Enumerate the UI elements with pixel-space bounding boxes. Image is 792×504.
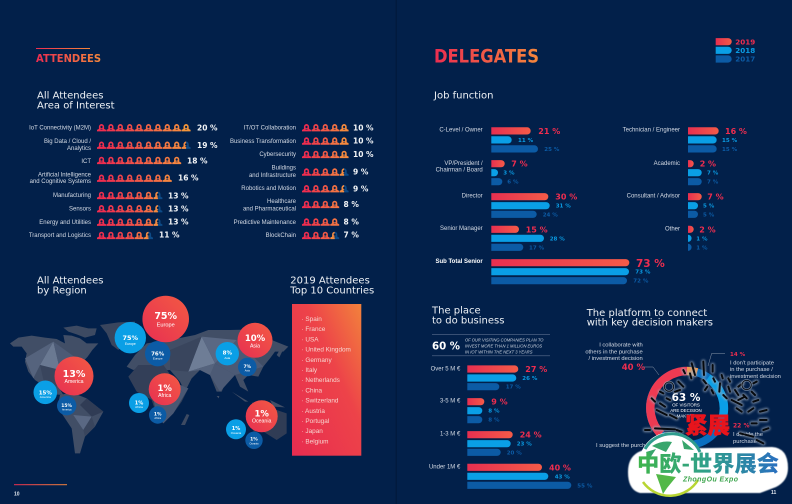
row: IoT connectivity: 20 %	[197, 124, 218, 133]
bars: academic: 2 %	[700, 160, 716, 169]
bars: director: Director	[462, 194, 483, 200]
bars: technician: Technician / Engineer	[623, 128, 680, 134]
map: europe asia africa oceania	[127, 329, 288, 440]
bubbles: africa: Africa	[135, 405, 143, 409]
row: buildings: and Infrastructure	[249, 173, 297, 179]
row: healthcare	[243, 199, 359, 212]
panel: countries list: · USA	[302, 336, 319, 343]
heading: area of interest: All Attendees	[37, 90, 103, 101]
bubbles: oceania: Oceania	[252, 418, 271, 424]
row: buildings: Buildings	[272, 166, 296, 172]
callout: 60 percent: IN IOT WITHIN THE NEXT 3 YEARS	[465, 350, 533, 355]
panel: countries list: · Portugal	[302, 418, 329, 425]
row: business transformation	[230, 137, 374, 146]
callout: 60 percent: OF OUR VISITING COMPANIES PLAN TO	[465, 338, 543, 342]
callout: 60 percent: 60 %	[432, 340, 460, 352]
callout: 40 percent: I collaborate with	[599, 343, 643, 349]
world map	[10, 322, 288, 453]
bars: sub total senior: 72 %	[633, 279, 649, 285]
panel: attendees page	[10, 48, 374, 498]
bubbles: asia: Asia	[250, 344, 260, 350]
bars: over 5M: 27 %	[525, 365, 547, 374]
bars: c-level: 21 %	[538, 127, 560, 136]
row: big data: 19 %	[197, 141, 218, 150]
row: energy and utilities: Energy and Utilities	[39, 220, 91, 226]
callout: 14 percent	[708, 352, 781, 380]
bars: vp: 6 %	[507, 180, 519, 186]
row: big data: Analytics	[67, 146, 91, 152]
bubbles: america: America	[40, 395, 51, 399]
bars: under 1M: 55 %	[577, 483, 593, 489]
bubbles: oceania: 1%	[232, 426, 240, 432]
heading: the place to do business: to do business	[432, 315, 504, 326]
page number 11: 11	[771, 490, 777, 496]
legend: years	[716, 38, 755, 64]
panel: countries list	[292, 304, 361, 456]
heading: by region: All Attendees	[37, 275, 103, 286]
bars: vp: VP/President /	[444, 161, 483, 167]
bubbles: africa	[129, 373, 181, 424]
heading: delegates: DELEGATES	[434, 46, 539, 68]
bubbles: europe: Europe	[153, 356, 163, 360]
bars: c-level	[439, 127, 560, 153]
bubbles: america: America	[62, 408, 72, 412]
row: healthcare: 8 %	[344, 200, 359, 209]
heading: attendees: ATTENDEES	[36, 53, 101, 65]
legend: years: 2018	[735, 47, 755, 55]
row: ICT: ICT	[81, 159, 91, 165]
bars: director: 30 %	[555, 193, 577, 202]
chart: job function right	[623, 127, 747, 251]
bars: academic: 7 %	[707, 171, 719, 177]
callout: suggest: I suggest the purchase	[596, 443, 655, 449]
panel: countries list: · Austria	[302, 408, 325, 415]
chart: decision makers donut: MAKERS	[677, 414, 695, 418]
watermark: speckle	[645, 362, 768, 443]
heading: job function: Job function	[433, 90, 493, 101]
bars: director: 31 %	[556, 204, 571, 210]
bars: consultant: 7 %	[707, 193, 724, 202]
bars: vp: Chairman / Board	[436, 168, 483, 174]
bubbles: america: 15%	[61, 403, 73, 409]
callout: 40 percent	[585, 343, 659, 375]
page number 10	[14, 484, 67, 498]
bars: c-level: 11 %	[518, 138, 534, 144]
bubbles: oceania: 1%	[254, 410, 269, 420]
bars: other: 1 %	[696, 245, 708, 251]
bars: 3-5M: 8 %	[488, 418, 500, 424]
row: robotics and motion: Robotics and Motion	[241, 186, 296, 192]
bars: 1-3M: 1-3 M €	[440, 432, 461, 438]
row: IT/OT collaboration	[244, 124, 374, 133]
map: americas	[10, 322, 135, 453]
bars: academic: Academic	[654, 161, 680, 167]
bars: technician: 16 %	[725, 127, 747, 136]
bubbles: oceania	[226, 400, 278, 449]
bubbles: europe: Europe	[157, 322, 175, 328]
bars: 3-5M: 3-5 M €	[440, 398, 461, 404]
row: blockchain: 7 %	[344, 230, 359, 239]
bars: senior manager: 17 %	[529, 245, 545, 251]
row: business transformation: 10 %	[353, 137, 374, 146]
bubbles: america: America	[64, 379, 84, 385]
callout: 40 percent: / investment decision	[589, 356, 643, 362]
callout: 14 percent: 14 %	[730, 352, 746, 358]
chart: interest left column	[29, 124, 218, 239]
row: blockchain: BlockChain	[266, 233, 296, 239]
bars: 3-5M: 8 %	[488, 409, 500, 415]
row: buildings	[249, 166, 369, 179]
chart: job function left	[435, 127, 665, 285]
bars: technician	[623, 127, 747, 153]
row: energy and utilities: 13 %	[168, 218, 189, 227]
row: artificial intelligence: 16 %	[178, 174, 199, 183]
row: IoT connectivity	[29, 124, 218, 133]
bars: over 5M: 26 %	[522, 376, 538, 382]
heading: top 10 countries: 2019 Attendees	[290, 275, 370, 286]
row: artificial intelligence: and Cognitive Systems	[30, 179, 91, 185]
legend: years: 2019	[735, 38, 755, 46]
panel: countries list: · Belgium	[302, 438, 328, 445]
bars: technician: 15 %	[722, 147, 738, 153]
callout: 60 percent: INVEST MORE THAN 1 MILLION EUROS	[465, 344, 542, 349]
bubbles: europe: 76%	[151, 352, 165, 358]
bars: consultant: 5 %	[703, 212, 715, 218]
chart: investment	[429, 365, 593, 489]
callout: 14 percent: investment decision	[730, 374, 781, 380]
row: sensors: 13 %	[168, 204, 189, 213]
bars: sub total senior: 73 %	[636, 258, 665, 270]
panel: countries list: · United Kingdom	[302, 347, 351, 354]
bars: 1-3M	[440, 431, 542, 456]
row: artificial intelligence	[30, 172, 199, 185]
chart: decision makers donut: OF VISITORS	[672, 402, 700, 408]
bars: 3-5M	[440, 398, 508, 424]
bars: sub total senior: Sub Total Senior	[435, 259, 483, 265]
bars: director	[462, 193, 577, 218]
heading: platform: The platform to connect	[587, 308, 707, 319]
callout: 40 percent: others in the purchase	[585, 350, 643, 356]
bubbles: europe: 75%	[154, 311, 178, 322]
legend: years: 2017	[735, 56, 755, 64]
bubbles: america: 13%	[63, 369, 86, 380]
row: sensors: Sensors	[69, 206, 91, 212]
row: IT/OT collaboration: IT/OT Collaboration	[244, 126, 296, 132]
row: blockchain	[266, 230, 359, 239]
bars: 1-3M: 24 %	[520, 431, 542, 440]
panel: countries list: · Netherlands	[302, 377, 340, 384]
bubbles: oceania: 1%	[250, 436, 258, 442]
bars: over 5M: 17 %	[506, 385, 521, 391]
bars: senior manager	[440, 225, 565, 251]
row: robotics and motion	[241, 185, 369, 194]
bars: consultant	[627, 193, 724, 218]
watermark: red characters: 紧展	[685, 408, 730, 440]
bubbles: europe	[115, 296, 189, 366]
bars: senior manager: 28 %	[550, 236, 565, 242]
row: energy and utilities	[39, 218, 189, 227]
bars: other: Other	[665, 226, 680, 232]
row: cybersecurity: 10 %	[353, 150, 374, 159]
row: IoT connectivity: IoT Connectivity (M2M)	[29, 126, 91, 132]
callout: 22 percent: 22 %	[733, 423, 749, 430]
row: business transformation: Business Transformation	[230, 139, 296, 145]
row: transport and logistics: Transport and Logistics	[29, 233, 91, 239]
bubbles: europe: 75%	[123, 334, 139, 342]
row: predictive maintenance: 8 %	[344, 217, 359, 226]
row: ICT	[81, 157, 208, 166]
row: big data: Big Data / Cloud /	[44, 139, 91, 145]
row: sensors	[69, 204, 189, 213]
bubbles: asia: 10%	[245, 334, 266, 344]
bubbles: america: 15%	[39, 390, 52, 396]
panel: countries list: · Japan	[302, 428, 323, 435]
callout: 22 percent	[733, 423, 763, 445]
bars: under 1M: Under 1M €	[429, 464, 461, 470]
chart: decision makers donut	[650, 371, 724, 445]
panel: countries list: · China	[302, 387, 323, 394]
bars: other	[665, 225, 716, 251]
row: buildings: 9 %	[353, 167, 369, 176]
heading: top 10 countries: Top 10 Countries	[289, 285, 374, 296]
bars: academic	[654, 160, 719, 186]
row: cybersecurity	[259, 150, 374, 159]
row: big data	[44, 139, 218, 152]
bars: vp	[436, 160, 528, 186]
bubbles: asia: Asia	[245, 368, 250, 372]
row: artificial intelligence: Artificial Intelligence	[38, 172, 91, 178]
heading: attendees	[36, 48, 101, 65]
row: predictive maintenance: Predictive Maintenance	[234, 220, 297, 226]
bars: director: 24 %	[543, 212, 558, 218]
bubbles: africa: 1%	[135, 400, 143, 406]
row: cybersecurity: Cybersecurity	[259, 152, 296, 158]
chart: decision makers donut: ARE DECISION	[670, 408, 702, 413]
callout: 14 percent: I don't participate	[730, 360, 774, 366]
heading: the place to do business: The place	[432, 306, 481, 317]
bars: other: 2 %	[699, 225, 716, 234]
watermark: zhongou expo logo: 中欧-世界展会	[637, 446, 779, 478]
page number 10: 10	[14, 492, 20, 498]
bubbles: asia: 8%	[223, 350, 232, 356]
bubbles: oceania: Oceania	[250, 442, 259, 445]
bars: under 1M: 43 %	[555, 474, 570, 480]
bubbles: asia	[216, 323, 272, 376]
bars: consultant: 5 %	[703, 204, 715, 210]
panel: countries list: · France	[302, 326, 326, 333]
bars: other: 1 %	[696, 236, 708, 242]
bars: consultant: Consultant / Advisor	[627, 194, 680, 200]
bars: vp: 3 %	[503, 171, 515, 177]
bars: c-level: 25 %	[544, 147, 560, 153]
watermark: zhongou expo logo: ZhongOu Expo	[682, 476, 739, 484]
bars: over 5M: Over 5 M €	[431, 366, 461, 372]
bars: technician: 15 %	[722, 138, 738, 144]
bars: sub total senior	[435, 258, 665, 285]
callout: 22 percent: purchase	[733, 439, 757, 445]
bars: 1-3M: 23 %	[517, 442, 532, 448]
panel: countries list: · Germany	[302, 357, 332, 364]
bars: 1-3M: 20 %	[507, 450, 522, 456]
bubbles: africa: 1%	[154, 412, 162, 418]
heading: platform: with key decision makers	[587, 318, 713, 329]
row: predictive maintenance	[234, 217, 359, 226]
panel: countries list: · Italy	[302, 367, 318, 374]
panel: countries list: · Switzerland	[302, 398, 339, 405]
row: healthcare: and Pharmaceutical	[243, 206, 296, 212]
bars: under 1M	[429, 463, 593, 489]
panel: countries list: · Spain	[302, 316, 322, 323]
heading: area of interest: Area of Interest	[37, 100, 115, 111]
bubbles: africa: Africa	[154, 416, 162, 420]
row: healthcare: Healthcare	[267, 199, 296, 205]
callout: 60 percent	[432, 334, 550, 356]
row: manufacturing	[53, 192, 189, 201]
bars: 3-5M: 9 %	[491, 398, 508, 407]
bars: sub total senior: 73 %	[635, 270, 651, 276]
bars: academic: 7 %	[707, 180, 719, 186]
callout: 14 percent: in the purchase /	[730, 367, 773, 373]
chart: interest right column	[230, 124, 374, 239]
row: robotics and motion: 9 %	[353, 185, 369, 194]
row: manufacturing: Manufacturing	[53, 193, 91, 199]
bubbles: oceania: Oceania	[231, 431, 242, 435]
bubbles: asia: Asia	[224, 356, 231, 360]
bars: c-level: C-Level / Owner	[439, 128, 483, 134]
bars: vp: 7 %	[511, 160, 528, 169]
callout: 40 percent: 40 %	[622, 363, 645, 373]
row: transport and logistics: 11 %	[159, 230, 180, 239]
row: ICT: 18 %	[187, 157, 208, 166]
chart: decision makers donut: 63 %	[672, 392, 701, 404]
bars: senior manager: Senior Manager	[440, 226, 483, 232]
row: IT/OT collaboration: 10 %	[353, 124, 374, 133]
panel: delegates page	[429, 38, 788, 496]
bubbles: africa: Africa	[158, 393, 171, 399]
bubbles: america	[34, 356, 94, 415]
bubbles: europe: Europe	[125, 342, 136, 346]
callout: 22 percent: I decide the	[733, 432, 763, 438]
bars: senior manager: 15 %	[526, 225, 548, 234]
row: transport and logistics	[29, 230, 180, 239]
watermark: zhongou expo logo	[628, 432, 788, 496]
bubbles: africa: 1%	[157, 384, 172, 394]
heading: by region: by Region	[37, 285, 87, 296]
bubbles: asia: 7%	[243, 364, 252, 370]
row: manufacturing: 13 %	[168, 192, 189, 201]
bars: over 5M	[431, 365, 547, 391]
bars: under 1M: 40 %	[549, 463, 571, 472]
